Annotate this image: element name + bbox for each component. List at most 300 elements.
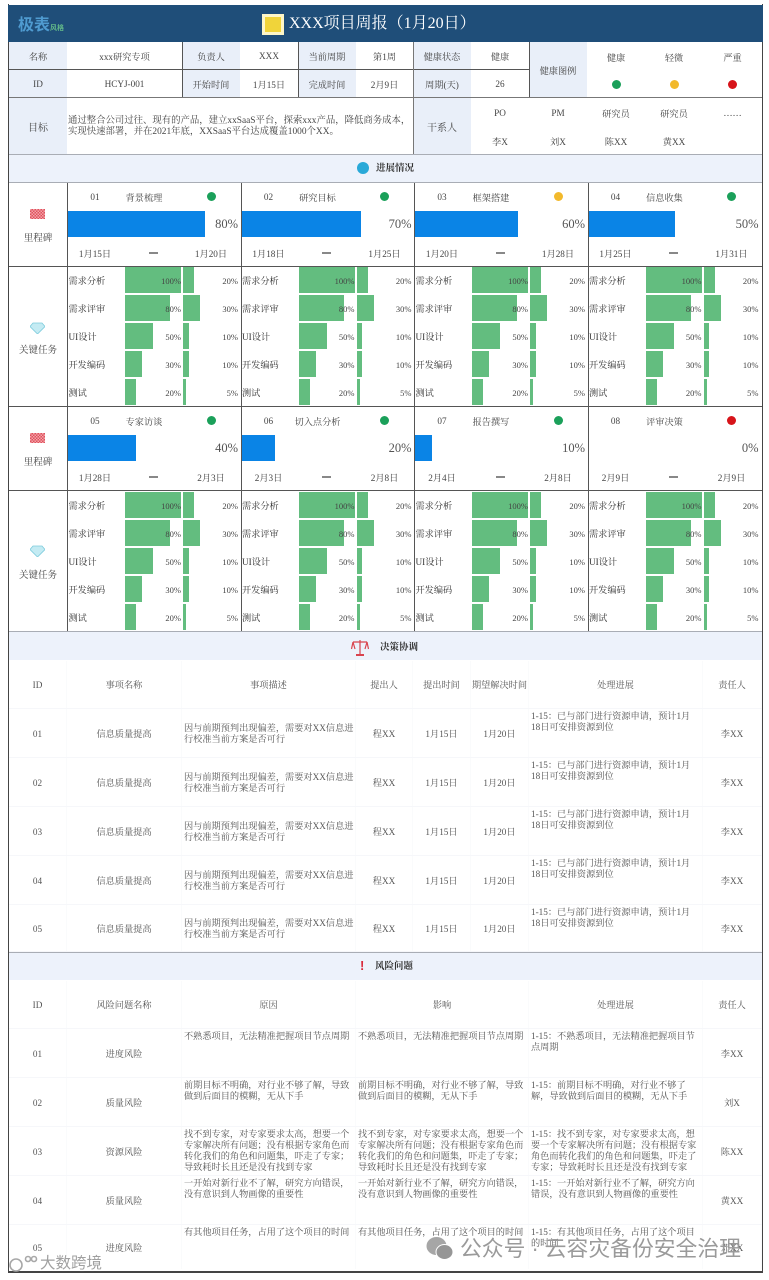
progress bar	[67, 435, 136, 461]
chart: key tasks 02: 100%	[335, 276, 354, 286]
progress bar	[414, 211, 518, 237]
decision row 02: 1月20日	[483, 778, 516, 788]
risk row 02: 质量风险	[106, 1098, 142, 1108]
milestone 08	[602, 416, 758, 483]
chart: key tasks 04: 20%	[743, 276, 758, 286]
decision row 05: 行校准当前方案是否可行	[184, 929, 285, 939]
chart: key tasks 08: 80%	[686, 529, 702, 539]
milestone number: 03	[437, 192, 447, 202]
label: goal	[9, 98, 67, 154]
label: owner: 负责人	[197, 52, 225, 62]
risk row 04: 错误，没有意识到人物画像的重要性	[531, 1189, 678, 1199]
chart: key tasks 07	[416, 492, 585, 630]
chart: key tasks 05: 20%	[165, 613, 181, 623]
end date: 1月20日	[195, 249, 227, 259]
stakeholder name: 刘X	[550, 137, 566, 147]
label: cycle days: 周期(天)	[425, 80, 459, 90]
chart: key tasks 07: 50%	[512, 557, 528, 567]
chart: key tasks 06: 测试	[242, 613, 260, 623]
icon: brand mark	[9, 1256, 38, 1272]
chart: key tasks 07: 100%	[508, 501, 528, 511]
table header: ID	[33, 1000, 42, 1010]
chart: key tasks 03: 20%	[569, 276, 585, 286]
table header: 处理进展	[597, 1000, 634, 1010]
decision row 02: 18日可安排资源到位	[531, 771, 614, 781]
stakeholder role: PO: PO	[494, 108, 506, 118]
chart: key tasks 01: 5%	[227, 388, 238, 398]
chart: key tasks 03: 50%	[512, 332, 528, 342]
risk row 03: 转化我们的角色和问题集，吓走了专家；	[358, 1151, 523, 1161]
decision row 01: 李XX	[721, 728, 743, 738]
watermark text: 公众号 · 云容灾备份安全治理	[460, 1236, 741, 1261]
status dot	[380, 416, 389, 425]
risk row 03: 1-15：找不到专家，对专家要求太高，想	[531, 1129, 695, 1139]
risk row 02: 刘X	[724, 1098, 740, 1108]
decision row 05: 因与前期预判出现偏差，需要对XX信息进	[184, 918, 353, 928]
chart: key tasks 08: 50%	[686, 557, 702, 567]
risk row 02: 前期目标不明确，对行业不够了解，导致	[358, 1080, 523, 1090]
dash arrow	[496, 252, 504, 254]
chart: key tasks 01	[68, 267, 238, 405]
label: health legend	[529, 42, 587, 97]
milestone name: 切入点分析	[295, 417, 340, 427]
risk row 04: 1-15：一开始对新行业不了解，研究方向	[531, 1178, 695, 1188]
key tasks label: 关键任务	[19, 346, 57, 356]
table: risk issues	[9, 1000, 762, 1252]
decision row 05: 1-15：已与部门进行资源申请，预计1月	[531, 907, 690, 917]
chart: key tasks 03: 10%	[569, 360, 585, 370]
chart: key tasks 06: 20%	[339, 613, 354, 623]
table header: 影响	[433, 1000, 451, 1010]
percent: 60%	[562, 217, 585, 231]
risk row 03: 找不到专家，对专家要求太高，想要一个	[358, 1129, 523, 1139]
chart: key tasks 06	[242, 492, 412, 630]
decision row 03: 程XX	[373, 826, 395, 836]
decision row 01: 因与前期预判出现偏差，需要对XX信息进	[184, 723, 353, 733]
chart: key tasks 01: 30%	[165, 360, 181, 370]
label: current week	[298, 42, 356, 69]
chart: key tasks 04: 需求分析	[589, 276, 626, 286]
label: health status: 健康状态	[424, 52, 460, 62]
chart: key tasks 04: 80%	[686, 304, 702, 314]
decision row 01: 行校准当前方案是否可行	[184, 734, 285, 744]
chart: key tasks 07: 开发编码	[416, 585, 452, 595]
milestone 04	[589, 192, 758, 259]
section heading: risk issues	[9, 952, 762, 980]
milestone 02	[242, 192, 412, 259]
risk row 05: 的时间	[531, 1238, 559, 1248]
label: goal: 目标	[28, 122, 48, 134]
chart: key tasks 02: 需求评审	[242, 304, 279, 314]
goal text	[68, 114, 410, 137]
stakeholder role: researcher: 研究员	[602, 109, 630, 119]
key tasks label: 关键任务	[19, 571, 57, 581]
risk row 05: 有其他项目任务，占用了这个项目的时间	[184, 1227, 349, 1237]
start date: 1月18日	[252, 249, 285, 259]
chart: key tasks 07: 5%	[574, 613, 585, 623]
decision row 03: 因与前期预判出现偏差，需要对XX信息进	[184, 821, 353, 831]
value: id: HCYJ-001	[105, 78, 144, 88]
end date: 1月28日	[542, 249, 574, 259]
status dot	[727, 416, 736, 425]
chart: key tasks 08: 20%	[686, 613, 702, 623]
chart: key tasks 08: UI设计	[589, 557, 617, 567]
decision row 05: 信息质量提高	[96, 924, 152, 934]
chart: key tasks 05: 10%	[222, 585, 238, 595]
start date: 1月28日	[79, 473, 111, 483]
status dot	[206, 416, 216, 425]
panel: key tasks row 2 label	[19, 546, 57, 581]
stakeholder name: 黄XX	[663, 137, 685, 147]
value: name: xxx研究专项	[99, 52, 150, 62]
legend: minor: 轻微	[665, 53, 683, 63]
chart: key tasks 07: UI设计	[416, 557, 444, 567]
header banner	[8, 5, 763, 42]
dash arrow	[148, 252, 158, 254]
status dot	[727, 192, 736, 201]
chart: key tasks 03: 测试	[416, 388, 434, 398]
section heading: decision coordination	[9, 632, 762, 660]
end date: 2月3日	[197, 473, 225, 483]
chart: key tasks 04: UI设计	[589, 332, 617, 342]
risk row 02: 做到后面目的模糊，无从下手	[358, 1091, 477, 1101]
chart: key tasks 03: UI设计	[416, 332, 444, 342]
risk row 01: 01	[33, 1048, 42, 1058]
chart: key tasks 03: 需求评审	[416, 304, 452, 314]
dash arrow	[322, 252, 331, 254]
milestone name: 评审决策	[646, 417, 683, 427]
decision row 01: 1月15日	[425, 728, 458, 738]
label: stakeholders	[413, 98, 471, 154]
risk row 03: 陈XX	[721, 1146, 743, 1156]
label: cycle days	[413, 70, 471, 97]
start date: 2月4日	[428, 473, 456, 483]
end date: 1月25日	[368, 249, 401, 259]
percent: 40%	[215, 441, 238, 455]
risk row 03: 专家；导致耗时长且还是没有找到专家	[531, 1162, 687, 1172]
icon: title badge	[262, 14, 284, 35]
chart: key tasks 06: 开发编码	[242, 585, 279, 595]
chart: key tasks 03: 30%	[569, 304, 585, 314]
milestone number: 05	[90, 416, 100, 426]
start date: 2月9日	[602, 473, 629, 483]
chart: key tasks 04: 30%	[743, 304, 758, 314]
milestone 01	[68, 192, 238, 259]
table header: 风险问题名称	[96, 1000, 152, 1010]
chart: key tasks 02: 测试	[242, 388, 260, 398]
icon: diamond	[30, 322, 45, 334]
risk row 04: 质量风险	[106, 1196, 142, 1206]
chart: key tasks 08: 开发编码	[589, 585, 626, 595]
icon: milestone	[30, 433, 45, 443]
risk row 04	[9, 1176, 762, 1225]
icon: exclamation: !	[360, 958, 364, 973]
chart: key tasks 07: 30%	[512, 585, 528, 595]
decision row 02: 因与前期预判出现偏差，需要对XX信息进	[184, 772, 353, 782]
chart: key tasks 06: 100%	[335, 501, 354, 511]
milestone number: 04	[611, 192, 620, 202]
risk row 03: 导致耗时长且还是没有找到专家	[184, 1162, 313, 1172]
chart: key tasks 01: 80%	[165, 304, 181, 314]
risk row 03: 导致耗时长且还是没有找到专家	[358, 1162, 487, 1172]
risk row 04: 一开始对新行业不了解，研究方向错误，	[358, 1178, 523, 1188]
decision row 02: 1-15：已与部门进行资源申请，预计1月	[531, 760, 690, 770]
table header: 期望解决时间	[472, 680, 527, 690]
stakeholder role: PM: PM	[551, 108, 565, 118]
milestone name: 专家访谈	[126, 417, 162, 427]
risk row 01: 1-15：不熟悉项目，无法精准把握项目节	[531, 1031, 695, 1041]
decision row 05: 18日可安排资源到位	[531, 918, 614, 928]
decision row 04: 04	[33, 876, 42, 886]
icon: wechat	[426, 1237, 452, 1259]
watermark: corner brand	[9, 1254, 102, 1272]
chart: key tasks 08: 30%	[743, 529, 758, 539]
chart: key tasks 08: 需求分析	[589, 501, 626, 511]
chart: key tasks 08: 需求评审	[589, 529, 626, 539]
milestone label: 里程碑	[24, 234, 52, 244]
status dot	[554, 192, 562, 201]
chart: key tasks 05: 30%	[165, 585, 181, 595]
chart: key tasks 02: 20%	[396, 276, 412, 286]
percent: 70%	[389, 217, 412, 231]
label: id	[9, 70, 67, 97]
percent: 80%	[215, 217, 238, 231]
legend dot: red	[728, 80, 737, 89]
decision row 03: 信息质量提高	[96, 826, 152, 836]
chart: key tasks 02: 30%	[339, 360, 354, 370]
milestone 06	[242, 416, 412, 483]
chart: key tasks 02: 20%	[339, 388, 354, 398]
value: cycle days: 26	[495, 78, 505, 88]
chart: key tasks 08	[589, 492, 758, 630]
chart: key tasks 07: 需求分析	[416, 501, 452, 511]
chart: key tasks 05: 需求分析	[68, 501, 105, 511]
dash arrow	[669, 252, 678, 254]
chart: key tasks 01: UI设计	[68, 332, 97, 342]
chart: key tasks 01: 50%	[165, 332, 181, 342]
decision row 04: 1月20日	[483, 876, 516, 886]
decision row 02: 信息质量提高	[96, 778, 152, 788]
status dot	[554, 416, 562, 425]
chart: key tasks 05: 20%	[222, 501, 238, 511]
risk row 01: 不熟悉项目，无法精准把握项目节点周期	[358, 1031, 523, 1041]
status dot	[380, 192, 389, 201]
chart: key tasks 05	[68, 492, 238, 630]
chart: key tasks 06: 5%	[400, 613, 412, 623]
chart: key tasks 06: 50%	[339, 557, 354, 567]
chart: key tasks 06: 20%	[396, 501, 412, 511]
chart: key tasks 01: 开发编码	[68, 360, 105, 370]
chart: key tasks 04: 10%	[743, 332, 758, 342]
icon: milestone	[30, 209, 45, 219]
dash arrow	[496, 476, 504, 478]
risk row 03: 找不到专家，对专家要求太高，想要一个	[184, 1129, 349, 1139]
risk row 04: 没有意识到人物画像的重要性	[184, 1189, 303, 1199]
chart: key tasks 05: 10%	[222, 557, 238, 567]
milestone number: 07	[437, 416, 447, 426]
chart: key tasks 06: UI设计	[242, 557, 270, 567]
chart: key tasks 02: UI设计	[242, 332, 270, 342]
chart: key tasks 07: 测试	[416, 613, 434, 623]
risk row 03: 转化我们的角色和问题集，吓走了专家；	[184, 1151, 349, 1161]
table header	[9, 661, 762, 709]
goal text: 通过整合公司过往、现有的产品，建立xxSaaS平台，探索xxx产品，降低商务成本，	[68, 116, 410, 126]
dash arrow	[322, 476, 331, 478]
progress bar	[67, 211, 205, 237]
percent: 50%	[736, 217, 758, 231]
decision row 03: 18日可安排资源到位	[531, 820, 614, 830]
chart: key tasks 06: 30%	[339, 585, 354, 595]
chart: key tasks 04: 10%	[743, 360, 758, 370]
label: stakeholders: 干系人	[427, 122, 457, 134]
label: start time	[182, 70, 240, 97]
decision row 05: 1月20日	[483, 924, 516, 934]
decision row 04: 程XX	[373, 876, 395, 886]
legend dot: yellow	[670, 80, 678, 89]
decision row 01: 1-15：已与部门进行资源申请，预计1月	[531, 711, 690, 721]
chart: key tasks 04: 20%	[686, 388, 702, 398]
milestone number: 06	[264, 416, 273, 426]
chart: key tasks 05: 30%	[222, 529, 238, 539]
decision row 04	[9, 856, 762, 905]
value: owner: XXX	[259, 50, 279, 60]
risk row 05	[33, 1227, 744, 1252]
chart: key tasks 03: 100%	[508, 276, 528, 286]
progress bar	[240, 435, 274, 461]
stakeholder role: more: ……	[723, 108, 742, 118]
risk row 03: 角色而转化我们的角色和问题集，吓走了	[531, 1151, 696, 1161]
decision row 01: 程XX	[373, 728, 395, 738]
progress bar	[240, 211, 360, 237]
chart: key tasks 05: 80%	[165, 529, 181, 539]
milestone name: 研究目标	[299, 193, 336, 203]
dash arrow	[669, 476, 678, 478]
label: current week: 当前周期	[309, 52, 345, 62]
panel: milestones row 1	[24, 209, 52, 244]
chart: key tasks 06: 需求分析	[242, 501, 279, 511]
table header: 责任人	[718, 1000, 746, 1010]
label: finish time	[298, 70, 356, 97]
decision row 05	[9, 905, 762, 952]
table header: ID	[33, 680, 42, 690]
risk row 03: 专家解决所有问题；没有根据专家角色而	[184, 1140, 349, 1150]
chart: key tasks 01: 20%	[222, 276, 238, 286]
panel: project info	[9, 42, 762, 154]
table header: 原因	[259, 1000, 278, 1010]
risk row 02: 做到后面目的模糊，无从下手	[184, 1091, 303, 1101]
risk row 02: 02	[33, 1098, 42, 1108]
chart: key tasks 06: 10%	[396, 585, 412, 595]
chart: key tasks 08: 30%	[686, 585, 702, 595]
chart: key tasks 02: 80%	[339, 304, 354, 314]
start date: 1月20日	[426, 249, 458, 259]
decision row 01	[9, 709, 762, 758]
watermark: wechat account	[426, 1236, 741, 1261]
risk row 03: 03	[33, 1146, 42, 1156]
chart: key tasks 02: 10%	[396, 332, 412, 342]
chart: key tasks 06: 需求评审	[242, 529, 279, 539]
chart: key tasks 05: 50%	[165, 557, 181, 567]
milestone number: 01	[90, 192, 100, 202]
end date: 2月8日	[544, 473, 572, 483]
decision row 04: 1月15日	[425, 876, 458, 886]
decision row 03: 1-15：已与部门进行资源申请，预计1月	[531, 809, 690, 819]
table header: 提出人	[370, 680, 398, 690]
table header	[9, 981, 762, 1029]
decision row 03	[9, 807, 762, 856]
decision row 02: 02	[33, 778, 42, 788]
chart: key tasks 07: 30%	[569, 529, 585, 539]
risk row 01: 进度风险	[106, 1048, 142, 1058]
decision row 02: 程XX	[373, 778, 395, 788]
milestone label: 里程碑	[24, 458, 52, 468]
chart: key tasks 07: 20%	[569, 501, 585, 511]
progress heading text: 进展情况	[376, 164, 414, 174]
milestone 05	[68, 416, 238, 483]
risk row 05: 有其他项目任务，占用了这个项目的时间	[358, 1227, 523, 1237]
chart: key tasks 05: 5%	[227, 613, 238, 623]
label: owner	[182, 42, 240, 69]
chart: key tasks 02: 5%	[400, 388, 412, 398]
icon: diamond	[30, 546, 45, 557]
panel: milestones row 2	[24, 433, 52, 468]
milestone name: 报告撰写	[473, 417, 509, 427]
value: finish time: 2月9日	[371, 80, 398, 90]
legend dot: green	[612, 80, 621, 89]
chart: key tasks 03: 30%	[512, 360, 528, 370]
chart: key tasks 04: 开发编码	[589, 360, 626, 370]
chart: key tasks 04: 测试	[589, 388, 607, 398]
chart: key tasks 05: 测试	[68, 613, 87, 623]
chart: key tasks 02: 开发编码	[242, 360, 279, 370]
milestone number: 08	[611, 416, 620, 426]
chart: key tasks 07: 10%	[569, 557, 585, 567]
risk row 04: 黄XX	[721, 1196, 743, 1206]
chart: key tasks 05: 100%	[161, 501, 181, 511]
chart: key tasks 04: 5%	[747, 388, 758, 398]
decision row 04: 信息质量提高	[96, 876, 152, 886]
decision row 03: 1月20日	[483, 826, 516, 836]
decision row 02: 行校准当前方案是否可行	[184, 783, 285, 793]
risk row 03: 专家解决所有问题；没有根据专家角色而	[358, 1140, 523, 1150]
chart: key tasks 01: 需求评审	[68, 304, 105, 314]
chart: key tasks 02: 50%	[339, 332, 354, 342]
decision row 01: 18日可安排资源到位	[531, 722, 614, 732]
chart: key tasks 07: 20%	[512, 613, 528, 623]
chart: key tasks 02: 10%	[396, 360, 412, 370]
chart: key tasks 05: 开发编码	[68, 585, 105, 595]
chart: key tasks 04: 需求评审	[589, 304, 626, 314]
chart: key tasks 04: 100%	[682, 276, 702, 286]
stakeholder role: researcher: 研究员	[660, 109, 688, 119]
risk heading text: 风险问题	[375, 962, 413, 972]
risk row 05: 05	[33, 1242, 42, 1252]
chart: key tasks 08: 5%	[747, 613, 758, 623]
risk row 02: 1-15：前期目标不明确，对行业不够了	[531, 1080, 686, 1090]
percent: 0%	[742, 441, 758, 455]
decision row 04: 因与前期预判出现偏差，需要对XX信息进	[184, 870, 353, 880]
stakeholder name: 陈XX	[605, 137, 627, 147]
chart: key tasks 01: 测试	[68, 388, 87, 398]
milestone name: 背景梳理	[126, 193, 162, 203]
decision row 01: 1月20日	[483, 728, 516, 738]
risk row 03: 资源风险	[106, 1146, 142, 1156]
chart: key tasks 07: 10%	[569, 585, 585, 595]
chart: key tasks 03: 需求分析	[416, 276, 452, 286]
chart: key tasks 08: 测试	[589, 613, 607, 623]
end date: 2月9日	[718, 473, 745, 483]
decision heading text: 决策协调	[380, 643, 418, 653]
